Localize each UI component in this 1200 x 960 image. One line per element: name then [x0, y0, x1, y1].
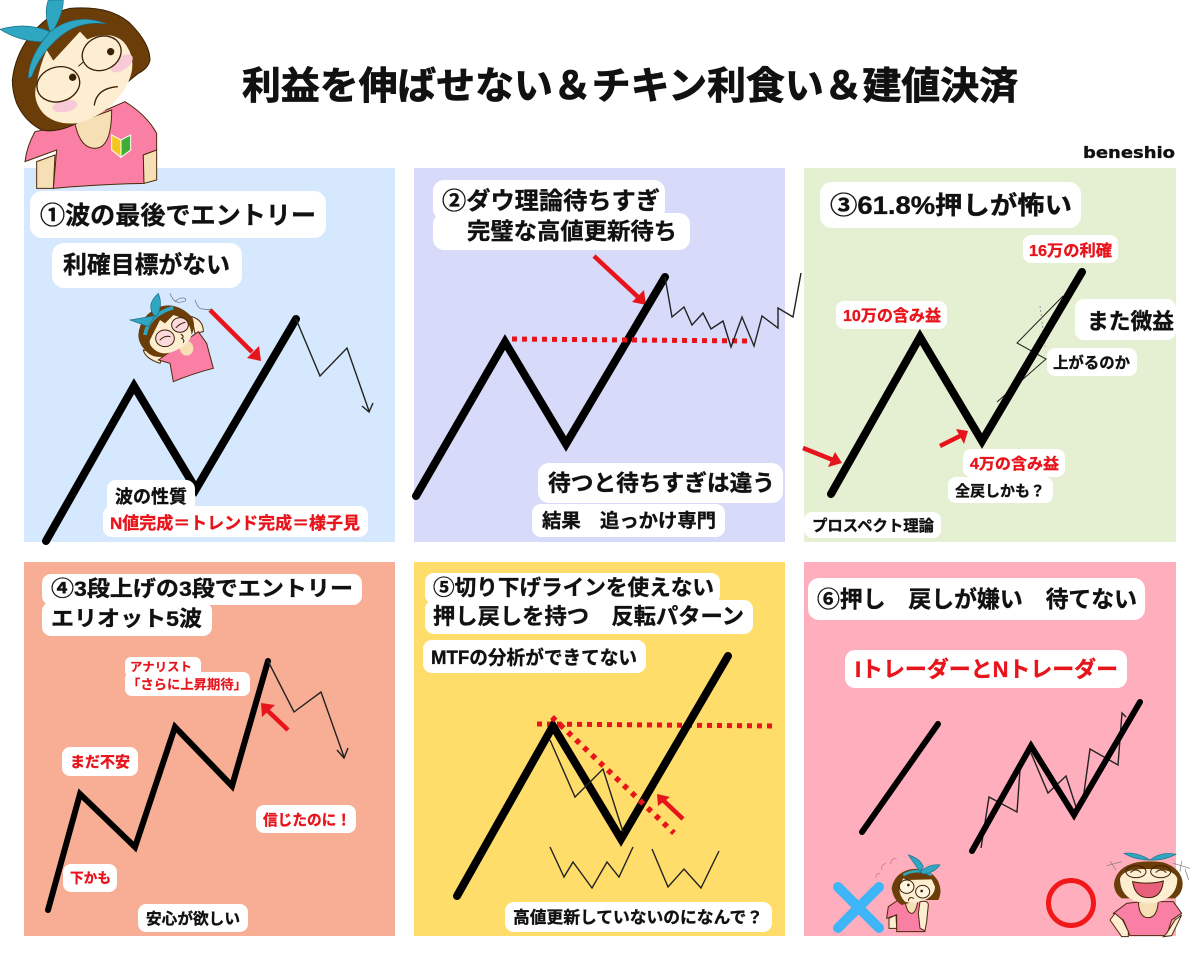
label: will it rise: 上がるのか [1053, 353, 1130, 372]
panel: 4 third wave of Elliott [24, 562, 395, 936]
icon: reclining character [130, 293, 213, 382]
heading: panel 4: ④3段上げの3段でエントリー [51, 577, 353, 601]
label: result chasing [532, 504, 725, 537]
chart: thick N line [972, 702, 1140, 851]
chart: thick three-step rise [48, 661, 268, 910]
callout: analyst expectation [125, 657, 250, 696]
chart: thin double bottom [652, 849, 719, 888]
arrow: red pointer to top [261, 703, 288, 730]
callout: I trader and N trader: IトレーダーとNトレーダー [855, 657, 1118, 682]
label: prospect theory [804, 512, 941, 538]
callout: waiting vs over-waiting [538, 463, 783, 503]
chart: thick N wave [457, 656, 728, 896]
chart: dotted down trendline [552, 717, 674, 833]
heading: panel 2: 完璧な高値更新待ち [467, 218, 677, 244]
icon: big worried character with beginner mark [0, 0, 157, 188]
chart: thin decline arrow [296, 319, 373, 412]
heading: panel 4: エリオット5波 [51, 607, 202, 631]
callout: why no new high [505, 902, 772, 932]
label: MTF analysis: MTFの分析ができてない [431, 646, 637, 669]
chart: thin decline arrow [268, 661, 348, 758]
callout: waiting vs over-waiting: 待つと待ちすぎは違う [548, 470, 775, 496]
chart: thick N wave [831, 272, 1082, 494]
label: may drop [63, 864, 117, 892]
arrow: red left entry [803, 448, 842, 467]
label: 40k unrealized: 4万の含み益 [970, 454, 1060, 473]
panel: 5 downtrend line reversal [414, 562, 785, 936]
callout: N value completion [103, 506, 368, 537]
heading: panel 1: ①波の最後でエントリー [40, 202, 316, 230]
icon: worried character [876, 855, 940, 932]
heading: panel 2: ②ダウ理論待ちすぎ [442, 187, 660, 215]
label: 100k unrealized: 10万の含み益 [843, 306, 941, 325]
label: full retrace worry: 全戻しかも？ [955, 482, 1045, 500]
label: wave nature: 波の性質 [115, 487, 187, 507]
panel: 6 I trader and N trader [804, 562, 1190, 937]
arrow: red pullback entry [940, 429, 968, 446]
heading: panel 5 [425, 573, 753, 634]
chart: thin range wave [665, 273, 801, 347]
title: 利益を伸ばせない＆チキン利食い＆建値決済 [242, 66, 1018, 108]
label: will it rise [1047, 348, 1137, 376]
chart: thin lower timeframe wave [997, 296, 1063, 402]
heading: panel 4 [42, 574, 362, 636]
heading: panel 1 [30, 191, 326, 238]
icon: blue cross [838, 887, 879, 928]
callout: N value completion: N値完成＝トレンド完成＝様子見 [110, 513, 360, 533]
label: 160k profit: 16万の利確 [1029, 241, 1112, 260]
arrow: red pointer to high [594, 256, 646, 305]
arrow: red entry pointer [210, 310, 261, 361]
chart: thin pullback wave [550, 740, 623, 832]
label: believed it [256, 805, 356, 833]
chart: thin N lower timeframe [981, 713, 1126, 848]
callout: I trader and N trader [845, 650, 1127, 688]
credit: beneshio: beneshio [1083, 143, 1175, 162]
label: no profit target [52, 243, 242, 288]
chart: thick N wave [416, 277, 665, 496]
heading: panel 5: ⑤切り下げラインを使えない [433, 576, 714, 600]
chart: thin triple bottom [550, 847, 633, 888]
chart: thick N wave [46, 319, 296, 541]
label: full retrace worry [948, 477, 1053, 503]
callout: analyst expectation: 「さらに上昇期待」 [127, 677, 247, 692]
label: MTF analysis [423, 640, 646, 673]
label: 160k profit [1023, 235, 1118, 263]
label: still anxious [62, 747, 138, 776]
icon: happy character [1107, 853, 1190, 937]
callout: small profit again: また微益 [1087, 309, 1174, 334]
label: 100k unrealized [836, 301, 947, 329]
chart: dotted horizontal resistance [537, 724, 777, 726]
heading: panel 5: 押し戻しを持つ 反転パターン [433, 604, 744, 629]
callout: why no new high: 高値更新していないのになんで？ [513, 907, 763, 927]
label: still anxious: まだ不安 [70, 753, 130, 771]
heading: panel 6: ⑥押し 戻しが嫌い 待てない [817, 586, 1137, 612]
label: prospect theory: プロスペクト理論 [812, 518, 935, 535]
heading: panel 2 [433, 180, 690, 250]
label: 40k unrealized [963, 449, 1065, 477]
label: result chasing: 結果 追っかけ専門 [542, 510, 716, 532]
label: may drop: 下かも [70, 870, 111, 886]
label: want reassurance [138, 904, 248, 932]
heading: panel 3 [820, 182, 1081, 228]
heading: panel 3: ③61.8%押しが怖い [830, 191, 1072, 220]
callout: small profit again [1075, 299, 1176, 340]
label: wave nature [107, 480, 195, 514]
icon: red circle [1048, 880, 1094, 926]
chart: dotted high line [512, 339, 750, 341]
panel: 3 fear of 61.8% retrace [803, 168, 1176, 542]
panel: 1 wave end entry [24, 168, 395, 542]
label: believed it: 信じたのに！ [263, 812, 351, 829]
heading: panel 6 [808, 578, 1145, 620]
label: want reassurance: 安心が欲しい [146, 909, 240, 928]
callout: analyst expectation: アナリスト [130, 660, 192, 674]
label: no profit target: 利確目標がない [63, 251, 230, 279]
panel: 2 Dow theory over-waiting [414, 168, 801, 542]
chart: thick I line [862, 724, 938, 832]
arrow: red pointer [657, 794, 683, 819]
